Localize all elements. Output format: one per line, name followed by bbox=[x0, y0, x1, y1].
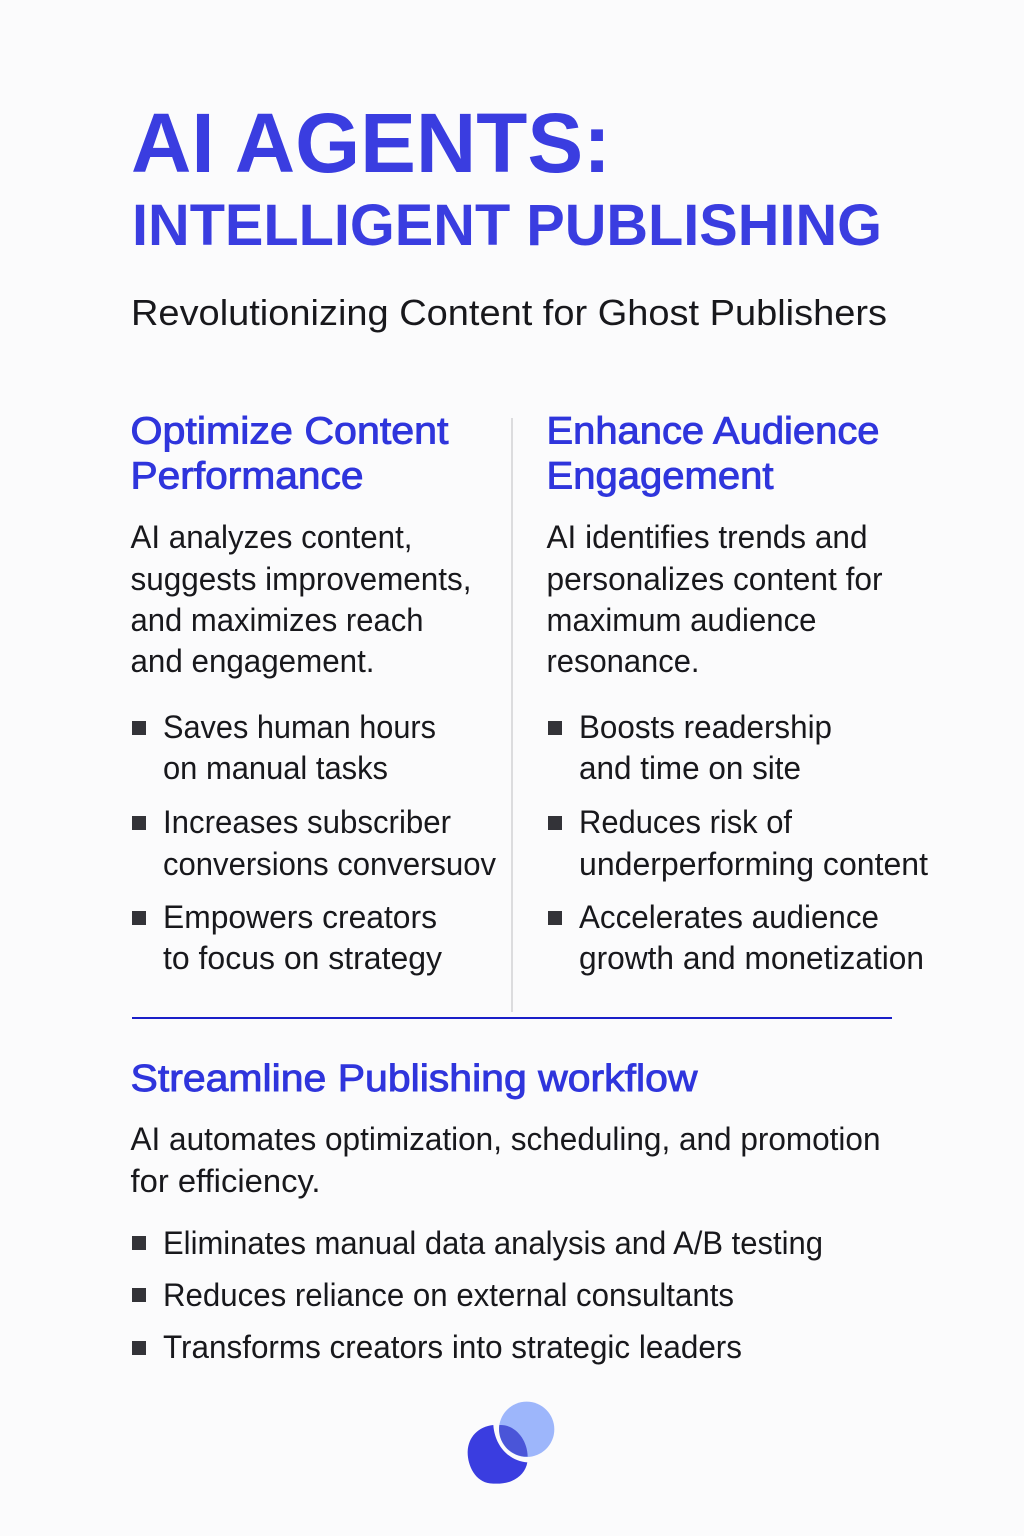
title bbox=[131, 96, 882, 258]
bullet: saves human hours bbox=[132, 709, 436, 786]
heading: streamline: Streamline Publishing workflow bbox=[130, 1058, 698, 1100]
column divider bbox=[511, 418, 513, 1012]
bullet: eliminates manual data analysis: Eliminates manual data analysis and A/B testing bbox=[163, 1225, 823, 1261]
text: optimize description bbox=[130, 519, 472, 679]
heading: enhance audience bbox=[546, 410, 880, 498]
bullet: accelerates audience: Accelerates audience bbox=[579, 899, 879, 935]
bullet: boosts readership: and time on site bbox=[579, 750, 801, 786]
panel: streamline publishing workflow bbox=[130, 1058, 880, 1365]
bullet: empowers creators bbox=[132, 899, 442, 976]
heading: optimize content bbox=[130, 410, 449, 498]
bullet: saves human hours: on manual tasks bbox=[163, 750, 388, 786]
panel: optimize content performance bbox=[130, 410, 496, 976]
bullet: boosts readership bbox=[548, 709, 832, 786]
text: enhance description: AI identifies trends and bbox=[546, 519, 868, 555]
bullet: empowers creators: Empowers creators bbox=[163, 899, 437, 935]
bullet: reduces risk bbox=[548, 804, 928, 882]
text: streamline description: for efficiency. bbox=[130, 1163, 320, 1199]
subtitle: Revolutionizing Content for Ghost Publishers bbox=[131, 292, 887, 333]
text: optimize description: suggests improvements, bbox=[130, 561, 472, 597]
section rule bbox=[132, 1017, 892, 1019]
bullet: saves human hours: Saves human hours bbox=[163, 709, 436, 745]
heading: optimize content: Optimize Content bbox=[130, 410, 449, 452]
text: enhance description: maximum audience bbox=[546, 602, 816, 638]
bullet: increases subscriber bbox=[132, 804, 496, 882]
bullet: reduces risk: Reduces risk of bbox=[579, 804, 792, 840]
bullet: empowers creators: to focus on strategy bbox=[163, 940, 442, 976]
bullet: accelerates audience bbox=[548, 899, 924, 976]
bullet: increases subscriber: conversions conversuov bbox=[163, 846, 496, 882]
text: optimize description: and maximizes reach bbox=[130, 602, 424, 638]
bullet: accelerates audience: growth and monetization bbox=[579, 940, 924, 976]
text: optimize description: AI analyzes content, bbox=[130, 519, 412, 555]
bullet: reduces reliance: Reduces reliance on external consultants bbox=[163, 1277, 734, 1313]
bullet: boosts readership: Boosts readership bbox=[579, 709, 832, 745]
text: optimize description: and engagement. bbox=[130, 643, 374, 679]
title: AI AGENTS: bbox=[131, 96, 611, 190]
heading: enhance audience: Engagement bbox=[546, 456, 774, 498]
bullet: reduces risk: underperforming content bbox=[579, 846, 928, 882]
text: enhance description: personalizes content for bbox=[546, 561, 883, 597]
text: streamline description: AI automates optimization, scheduling, and promotion bbox=[130, 1121, 880, 1157]
bullet: transforms creators: Transforms creators into strategic leaders bbox=[163, 1329, 742, 1365]
heading: enhance audience: Enhance Audience bbox=[546, 410, 880, 452]
text: enhance description bbox=[546, 519, 883, 679]
icon: logo of overlapping circles bbox=[468, 1402, 554, 1484]
text: enhance description: resonance. bbox=[546, 643, 700, 679]
text: streamline description bbox=[130, 1121, 880, 1199]
bullet: increases subscriber: Increases subscriber bbox=[163, 804, 451, 840]
title: INTELLIGENT PUBLISHING bbox=[132, 193, 882, 258]
panel: enhance audience engagement bbox=[546, 410, 928, 976]
heading: optimize content: Performance bbox=[130, 456, 364, 498]
